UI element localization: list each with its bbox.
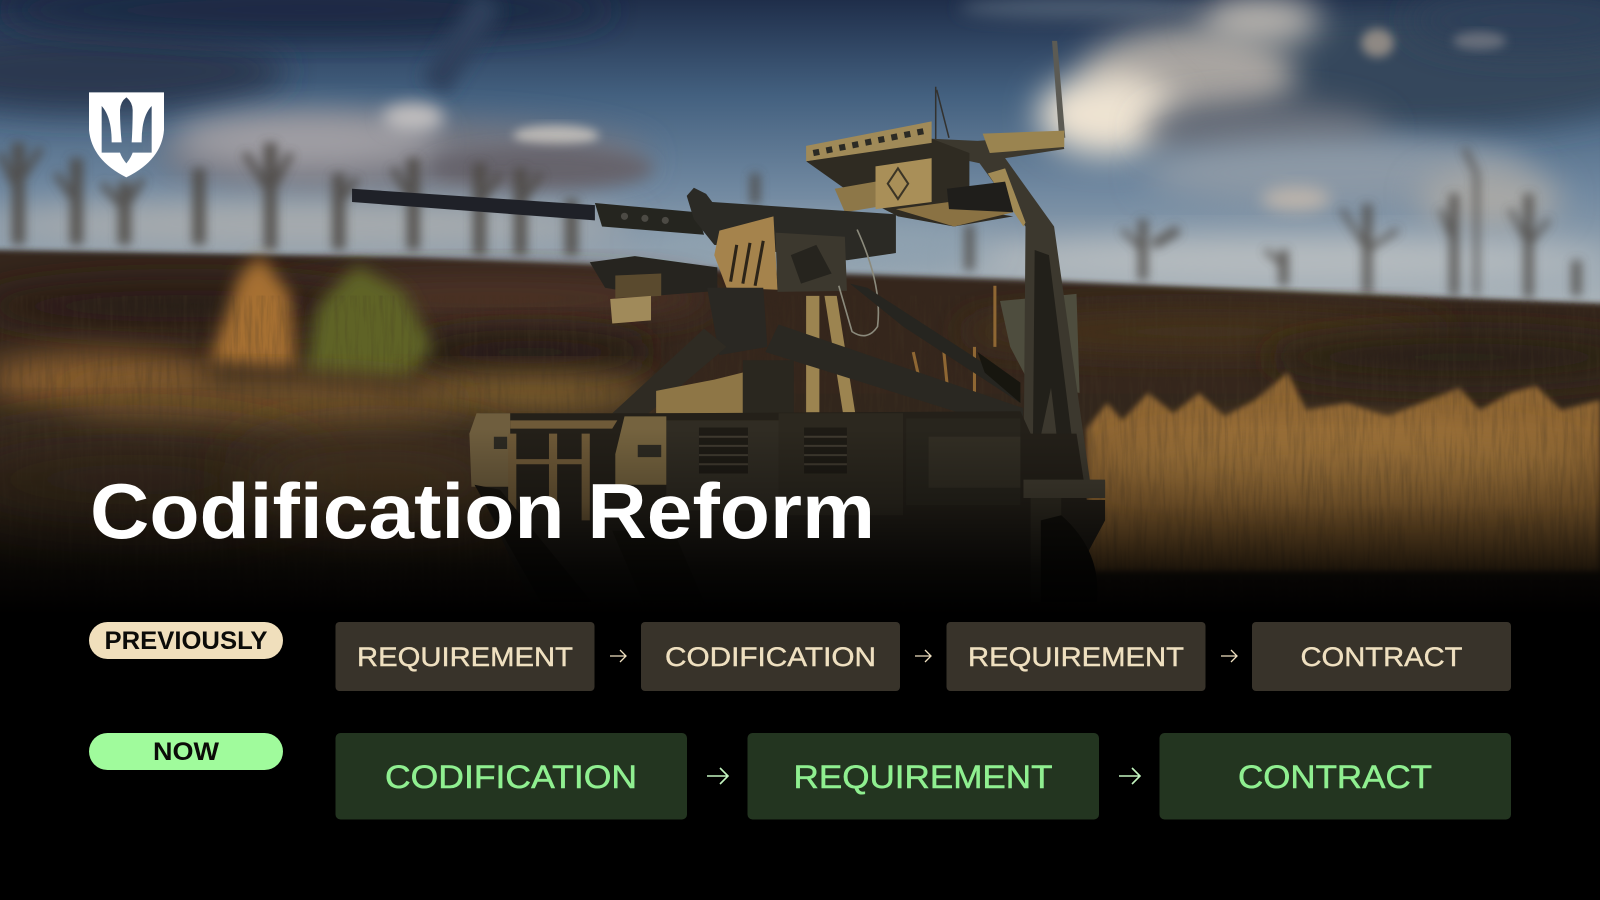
step: codification: CODIFICATION [385,759,637,795]
field [0,249,1600,673]
support arms [612,329,727,416]
tan side modules [469,413,510,487]
distant trees [0,143,1577,298]
golden grass [0,255,1600,612]
vehicle: robotic turret platform [352,41,1105,602]
step: requirement: REQUIREMENT [794,759,1052,795]
step: requirement: REQUIREMENT [968,642,1184,672]
antenna [1052,41,1065,138]
sensor head [806,139,1013,227]
step: contract: CONTRACT [1238,759,1432,795]
sky [0,0,1600,316]
step: requirement [946,622,1206,691]
step: codification [336,733,687,820]
step: contract: CONTRACT [1300,642,1462,672]
arrow [707,768,728,784]
gun barrel [352,189,595,220]
arrow [1221,650,1237,662]
step: requirement [336,622,594,691]
tan payload [656,372,743,413]
step: requirement [748,733,1099,820]
pivot mount [707,288,767,355]
step: codification [641,622,900,691]
cable [839,230,878,336]
pill: now [89,733,283,770]
pill: now: NOW [153,738,219,766]
step: codification: CODIFICATION [665,642,876,672]
dark fade to black [0,429,1600,614]
step: contract [1252,622,1511,691]
optics housing [590,256,717,296]
title: Codification Reform [90,467,875,555]
mast base and track [1023,480,1105,498]
camouflage bag [1000,294,1080,393]
pill: previously: PREVIOUSLY [104,627,268,655]
step: contract [1160,733,1511,820]
mast [932,135,1105,498]
arrow [610,650,626,662]
arrow [1119,768,1140,784]
tan rear column [806,296,855,412]
chassis [474,411,1105,602]
step: requirement: REQUIREMENT [357,642,573,672]
logo: shield with trident [89,92,164,177]
pill: previously [89,622,283,659]
turret armor [714,216,778,290]
gun receiver [687,188,896,260]
row: now [89,733,1511,820]
background photo: unmanned ground vehicle in a field at dusk [0,0,1600,578]
arrow [915,650,931,662]
row: previously [89,622,1511,691]
